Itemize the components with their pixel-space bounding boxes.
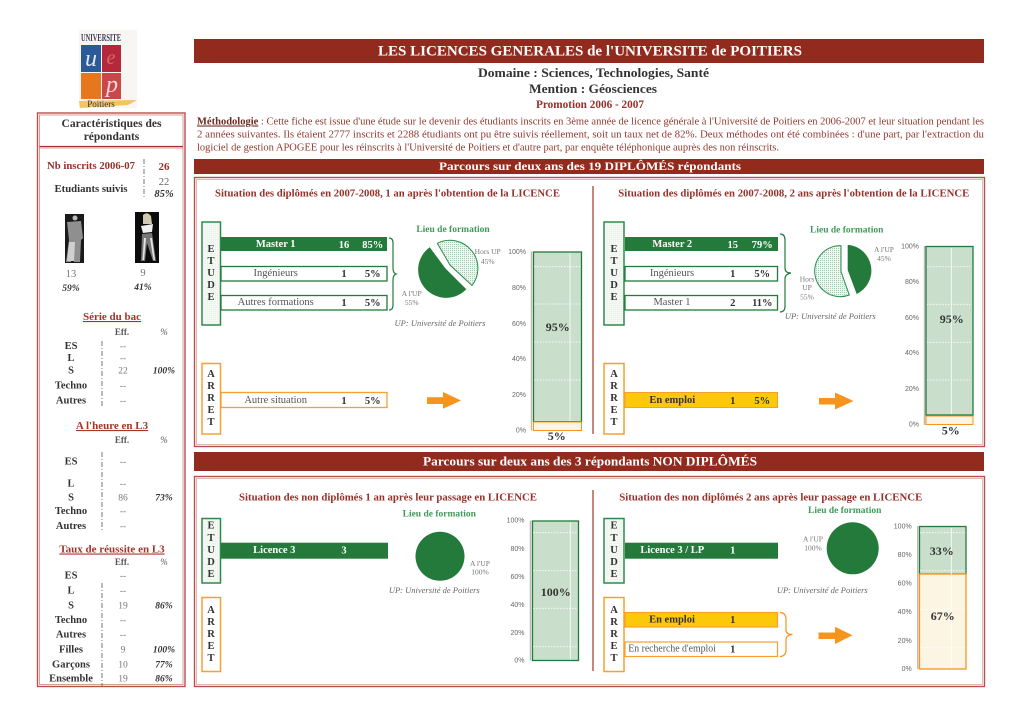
table: taux de réussite en L3: 100% [153, 646, 175, 656]
ARRET label box: A [207, 369, 215, 380]
stacked bar chart: 33% [930, 544, 954, 558]
ETUDE label box: D [610, 557, 618, 568]
row: licence 3 [221, 543, 388, 559]
rows: études: Ingénieurs [650, 268, 694, 279]
ARRET label box: R [610, 617, 618, 628]
table: série du bac: Série du bac [83, 311, 141, 323]
table: série du bac: -- [120, 354, 126, 364]
rows: études: 1 [730, 269, 735, 280]
subtitle: domain, mention, promotion: Domaine : Sciences, Technologies, Santé [478, 65, 709, 80]
brace [780, 234, 791, 312]
ETUDE label box [604, 222, 624, 325]
table: taux de réussite en L3 [49, 544, 175, 686]
table: série du bac: Techno [55, 380, 87, 392]
ARRET label box: R [207, 629, 215, 640]
enrolment figures: 22 [159, 177, 169, 188]
ETUDE label box: D [207, 557, 215, 568]
ETUDE label box: E [207, 569, 215, 580]
pie chart: lieu de formation: 55% [405, 298, 419, 307]
table: taux de réussite en L3: Autres [56, 630, 86, 640]
heading: parcours des non diplômés [194, 452, 984, 471]
rows: études: 85% [362, 240, 383, 251]
table: à l'heure en L3: -- [120, 507, 126, 517]
table: taux de réussite en L3: -- [120, 630, 126, 640]
row: licence 3: Licence 3 [253, 545, 295, 556]
ARRET label box [202, 364, 220, 434]
rows: études: Ingénieurs [254, 268, 298, 279]
pie chart: lieu de formation: 100% [804, 544, 822, 552]
pie chart: lieu de formation [777, 506, 882, 595]
table: série du bac: 100% [153, 366, 175, 376]
methodology text: logiciel de gestion APOGEE pour les réinscrits à l'Université de Poitiers et d'autre part, par enquête téléphonique auprès des non réinscrits. [197, 142, 779, 154]
stacked bar chart: 80% [905, 279, 919, 286]
stacked bar chart [507, 518, 578, 664]
table: à l'heure en L3: ES [65, 456, 78, 468]
ARRET label box: R [207, 393, 215, 404]
ARRET label box: R [610, 629, 618, 640]
stacked bar chart: 100% [901, 244, 919, 250]
pie chart: lieu de formation: 45% [877, 254, 891, 263]
stacked bar chart: 0% [902, 666, 912, 673]
gender counts: 13 [66, 269, 76, 280]
block: diplômés 2 ans après [604, 188, 973, 438]
rows: études [221, 237, 387, 310]
enrolment figures: Nb inscrits 2006-07 [47, 161, 135, 172]
rows: arrêt: En recherche d'emploi [628, 644, 716, 654]
rows: arrêt: En emploi [649, 614, 695, 626]
row: licence 3 / LP [625, 543, 778, 559]
stacked bar chart: 20% [510, 630, 524, 637]
enrolment figures: 85% [154, 189, 174, 200]
rows: études: Master 2 [652, 239, 692, 250]
block: non diplômés 1 an après: Situation des non diplômés 1 an après leur passage en LICENCE [239, 492, 537, 504]
stacked bar chart: 60% [510, 574, 524, 581]
block: non diplômés 2 ans après: Situation des non diplômés 2 ans après leur passage en LICENCE [619, 492, 922, 504]
row: en emploi: 5% [754, 396, 770, 407]
stacked bar chart: 100% [507, 518, 524, 524]
stacked bar chart: 100% [508, 249, 526, 256]
stacked bar chart: 0% [909, 422, 919, 428]
enrolment figures: 26 [158, 161, 170, 173]
table: série du bac: ES [65, 341, 78, 352]
row: en emploi: 1 [730, 396, 735, 407]
ETUDE label box: U [610, 545, 618, 556]
table: taux de réussite en L3: 19 [118, 602, 128, 612]
ARRET label box [202, 598, 220, 672]
rows: études: 1 [341, 298, 347, 309]
logo: Université de Poitiers: Poitiers [87, 99, 115, 109]
stacked bar chart: 80% [512, 285, 526, 292]
title banner [194, 39, 984, 63]
panel heading [62, 118, 162, 143]
stacked bar chart: 60% [898, 580, 912, 588]
ARRET label box: E [610, 641, 618, 652]
table: à l'heure en L3: % [160, 435, 168, 445]
subtitle: domain, mention, promotion: Promotion 2006 - 2007 [536, 99, 644, 111]
rows: études: Master 1 [653, 297, 691, 308]
row: licence 3: 3 [341, 546, 347, 556]
rows: arrêt: 1 [730, 615, 735, 626]
table: taux de réussite en L3: 86% [155, 602, 173, 612]
table: série du bac: -- [120, 382, 126, 392]
row: licence 3 / LP: 1 [730, 546, 735, 556]
stacked bar chart: 0% [516, 428, 526, 434]
ETUDE label box: E [610, 244, 618, 255]
table: taux de réussite en L3: 77% [155, 660, 173, 670]
table: à l'heure en L3: Eff. [115, 435, 129, 445]
table: taux de réussite en L3: % [160, 557, 168, 567]
table: à l'heure en L3: S [68, 492, 74, 504]
row: arrêt: Autre situation [244, 395, 308, 406]
table: à l'heure en L3: L [67, 478, 75, 490]
stacked bar chart: 80% [898, 552, 912, 559]
row: arrêt [221, 392, 387, 408]
logo: Université de Poitiers: u [85, 46, 97, 72]
table: à l'heure en L3: Autres [56, 521, 86, 532]
table: taux de réussite en L3: 19 [118, 674, 128, 684]
table: taux de réussite en L3: -- [120, 586, 126, 596]
ETUDE label box [202, 222, 220, 325]
ETUDE label box: T [207, 533, 215, 544]
row: arrêt: 1 [341, 396, 347, 407]
pie chart: lieu de formation: UP [802, 283, 812, 292]
pie chart: lieu de formation: A l'UP [803, 534, 823, 544]
block: non diplômés 2 ans après [604, 492, 966, 673]
icon: female student [135, 212, 159, 263]
pie chart: lieu de formation: Hors UP [475, 247, 501, 256]
pie chart: lieu de formation: UP: Université de Poitiers [785, 311, 876, 321]
logo: Université de Poitiers: p [104, 72, 118, 98]
rows: études: 79% [752, 240, 773, 251]
ARRET label box: E [610, 405, 618, 416]
stacked bar chart: 80% [510, 546, 524, 553]
stacked bar chart: 20% [512, 392, 526, 399]
methodology text: Méthodologie : Cette fiche est issue d'une étude sur le devenir des étudiants inscrits en 3ème année de licence générale à l'Université de Poitiers en 2006-2007 et leur situation pendant les [197, 116, 984, 128]
subtitle: domain, mention, promotion: Mention : Géosciences [529, 81, 657, 96]
ARRET label box: A [610, 605, 618, 616]
stacked bar chart: 5% [548, 429, 566, 443]
stacked bar chart: 20% [905, 386, 919, 393]
heading: parcours des non diplômés: Parcours sur deux ans des 3 répondants NON DIPLÔMÉS [423, 454, 757, 468]
pie chart: lieu de formation: UP: Université de Poitiers [777, 585, 868, 595]
row: arrêt: 5% [365, 396, 381, 407]
stacked bar chart: 100% [541, 585, 571, 599]
stacked bar chart: 60% [512, 321, 526, 328]
pie chart: lieu de formation [389, 510, 490, 595]
table: taux de réussite en L3: Garçons [52, 660, 90, 670]
table: à l'heure en L3: 73% [155, 494, 173, 504]
pie chart: lieu de formation: A l'UP [874, 245, 894, 254]
table: taux de réussite en L3: S [68, 600, 74, 612]
table: à l'heure en L3: -- [120, 458, 126, 468]
stacked bar chart: 0% [514, 658, 524, 664]
stacked bar chart: 5% [942, 424, 960, 438]
block: diplômés 1 an après [202, 188, 582, 443]
stacked bar chart: 100% [894, 524, 912, 530]
icon: male student [65, 214, 84, 263]
methodology text: 2 années suivantes. Ils étaient 2777 inscrits et 2288 étudiants ont pu être suivis réellement, soit un taux net de 82%. Deux méthodes ont été combinées : d'une part, par l'extraction du [197, 130, 985, 140]
ARRET label box: A [207, 605, 215, 616]
gender counts: 59% [62, 284, 80, 294]
ARRET label box [604, 364, 624, 434]
rows: études: 16 [339, 240, 349, 251]
table: à l'heure en L3: -- [120, 522, 126, 532]
stacked bar chart: 60% [905, 315, 919, 322]
arrow [818, 627, 852, 644]
ETUDE label box: E [610, 569, 618, 580]
table: taux de réussite en L3: -- [120, 616, 126, 626]
ARRET label box: A [610, 369, 618, 380]
panel: diplômés [194, 178, 984, 446]
rows: études: 5% [365, 298, 381, 309]
ETUDE label box: T [207, 256, 215, 267]
stacked bar chart: 40% [510, 602, 524, 609]
table: taux de réussite en L3: 10 [118, 660, 128, 670]
row: en emploi [625, 392, 778, 408]
pie chart: lieu de formation: Lieu de formation [810, 226, 884, 236]
pie chart: lieu de formation: Lieu de formation [808, 506, 882, 516]
table: taux de réussite en L3: -- [120, 572, 126, 582]
pie chart: lieu de formation: 55% [800, 292, 814, 302]
stacked bar chart [508, 249, 582, 443]
pie chart: lieu de formation: Lieu de formation [403, 510, 477, 520]
table: à l'heure en L3: 86 [118, 494, 128, 504]
heading: parcours des diplômés [194, 159, 984, 174]
logo: Université de Poitiers: UNIVERSITE [81, 33, 121, 44]
rows: études [625, 237, 778, 310]
ARRET label box: R [207, 381, 215, 392]
table: à l'heure en L3 [55, 420, 173, 532]
ETUDE label box [202, 518, 220, 583]
stacked bar chart: 67% [931, 609, 955, 623]
ETUDE label box: U [207, 268, 215, 279]
gender counts: 41% [133, 283, 152, 293]
title banner: LES LICENCES GENERALES de l'UNIVERSITE de POITIERS [378, 44, 802, 60]
pie chart: lieu de formation: A l'UP [402, 289, 422, 298]
table: série du bac [55, 311, 175, 407]
panel: caractéristiques des répondants [38, 113, 185, 686]
ETUDE label box: E [610, 292, 618, 303]
table: taux de réussite en L3: Eff. [115, 557, 129, 567]
rows: études: 5% [754, 269, 770, 280]
panel: non diplômés [194, 476, 984, 686]
ETUDE label box [604, 518, 624, 583]
stacked bar chart: 40% [905, 350, 919, 357]
table: série du bac: L [67, 353, 75, 364]
block: diplômés 1 an après: Situation des diplômés en 2007-2008, 1 an après l'obtention de la LICENCE [215, 188, 560, 200]
table: série du bac: % [160, 327, 168, 337]
rows: études: 11% [752, 298, 773, 309]
table: série du bac: -- [120, 396, 126, 406]
table: taux de réussite en L3: 9 [121, 646, 126, 656]
ETUDE label box: U [207, 545, 215, 556]
stacked bar chart [901, 244, 973, 438]
ETUDE label box: E [610, 520, 618, 532]
ARRET label box: E [207, 405, 215, 416]
pie chart: lieu de formation [785, 226, 894, 321]
table: série du bac: S [68, 366, 74, 376]
stacked bar chart [894, 524, 966, 673]
row: en emploi: En emploi [649, 395, 695, 406]
rows: arrêt [625, 612, 778, 656]
table: à l'heure en L3: -- [120, 480, 126, 490]
row: licence 3 / LP: Licence 3 / LP [640, 545, 705, 556]
table: série du bac: Autres [56, 396, 86, 406]
rows: études: Master 1 [256, 239, 296, 250]
ARRET label box: T [610, 417, 618, 428]
table: taux de réussite en L3: Filles [59, 644, 83, 656]
ARRET label box: T [610, 653, 618, 664]
gender counts: 9 [140, 268, 146, 279]
logo: Université de Poitiers [79, 30, 137, 109]
arrow [819, 392, 854, 410]
ARRET label box: T [207, 417, 215, 428]
rows: études: 5% [365, 269, 381, 280]
table: taux de réussite en L3: Techno [55, 615, 87, 626]
ETUDE label box: D [610, 280, 618, 291]
table: taux de réussite en L3: ES [65, 570, 78, 582]
gender counts [62, 268, 152, 294]
pie chart: lieu de formation: Hors [800, 274, 814, 284]
stacked bar chart: 95% [546, 320, 570, 334]
ETUDE label box: E [207, 244, 215, 255]
stacked bar chart: 40% [512, 356, 526, 363]
pie chart: lieu de formation: UP: Université de Poitiers [389, 585, 480, 595]
heading: parcours des diplômés: Parcours sur deux ans des 19 DIPLÔMÉS répondants [439, 159, 741, 173]
ETUDE label box: U [610, 268, 618, 279]
panel heading: répondants [84, 131, 140, 143]
rows: études: Autres formations [238, 297, 314, 308]
brace [389, 238, 396, 310]
table: taux de réussite en L3: L [67, 586, 75, 596]
enrolment figures [47, 159, 174, 200]
arrow [427, 392, 461, 409]
pie chart: lieu de formation: 45% [481, 257, 495, 266]
ETUDE label box: D [207, 280, 215, 291]
ETUDE label box: E [207, 520, 215, 532]
ETUDE label box: E [207, 292, 215, 303]
pie chart: lieu de formation [395, 225, 501, 328]
pie chart: lieu de formation: A l'UP [470, 559, 490, 568]
stacked bar chart: 20% [898, 638, 912, 645]
block: diplômés 2 ans après: Situation des diplômés en 2007-2008, 2 ans après l'obtention de la LICENCE [618, 188, 969, 200]
ETUDE label box: T [610, 256, 618, 267]
rows: études: 2 [730, 298, 735, 309]
logo: Université de Poitiers: e [107, 47, 116, 69]
rows: études: 15 [727, 240, 738, 251]
ETUDE label box: T [610, 533, 618, 544]
ARRET label box: E [207, 641, 215, 652]
table: à l'heure en L3: Techno [55, 506, 87, 517]
ARRET label box: R [610, 381, 618, 392]
rows: études: 1 [341, 269, 347, 280]
ARRET label box: R [207, 617, 215, 628]
pie chart: lieu de formation: 100% [471, 568, 489, 576]
table: série du bac: 22 [118, 366, 128, 376]
brace [780, 612, 792, 656]
ARRET label box: T [207, 653, 215, 664]
subtitle: domain, mention, promotion [478, 65, 709, 111]
table: taux de réussite en L3: Taux de réussite en L3 [59, 544, 165, 556]
stacked bar chart: 95% [940, 312, 964, 326]
block: non diplômés 1 an après [202, 492, 578, 672]
pie chart: lieu de formation: UP: Université de Poitiers [395, 318, 486, 328]
stacked bar chart: 40% [898, 609, 912, 616]
ARRET label box: R [610, 393, 618, 404]
pie chart: lieu de formation: Lieu de formation [416, 225, 490, 235]
ARRET label box [604, 598, 624, 672]
table: série du bac: -- [120, 342, 126, 352]
methodology text [197, 116, 985, 154]
rows: arrêt: 1 [730, 644, 735, 656]
table: à l'heure en L3: A l'heure en L3 [76, 420, 149, 432]
enrolment figures: Etudiants suivis [54, 184, 128, 195]
table: série du bac: Eff. [115, 327, 129, 337]
table: taux de réussite en L3: 86% [155, 674, 173, 684]
panel heading: Caractéristiques des [62, 118, 162, 130]
table: taux de réussite en L3: Ensemble [49, 674, 93, 684]
